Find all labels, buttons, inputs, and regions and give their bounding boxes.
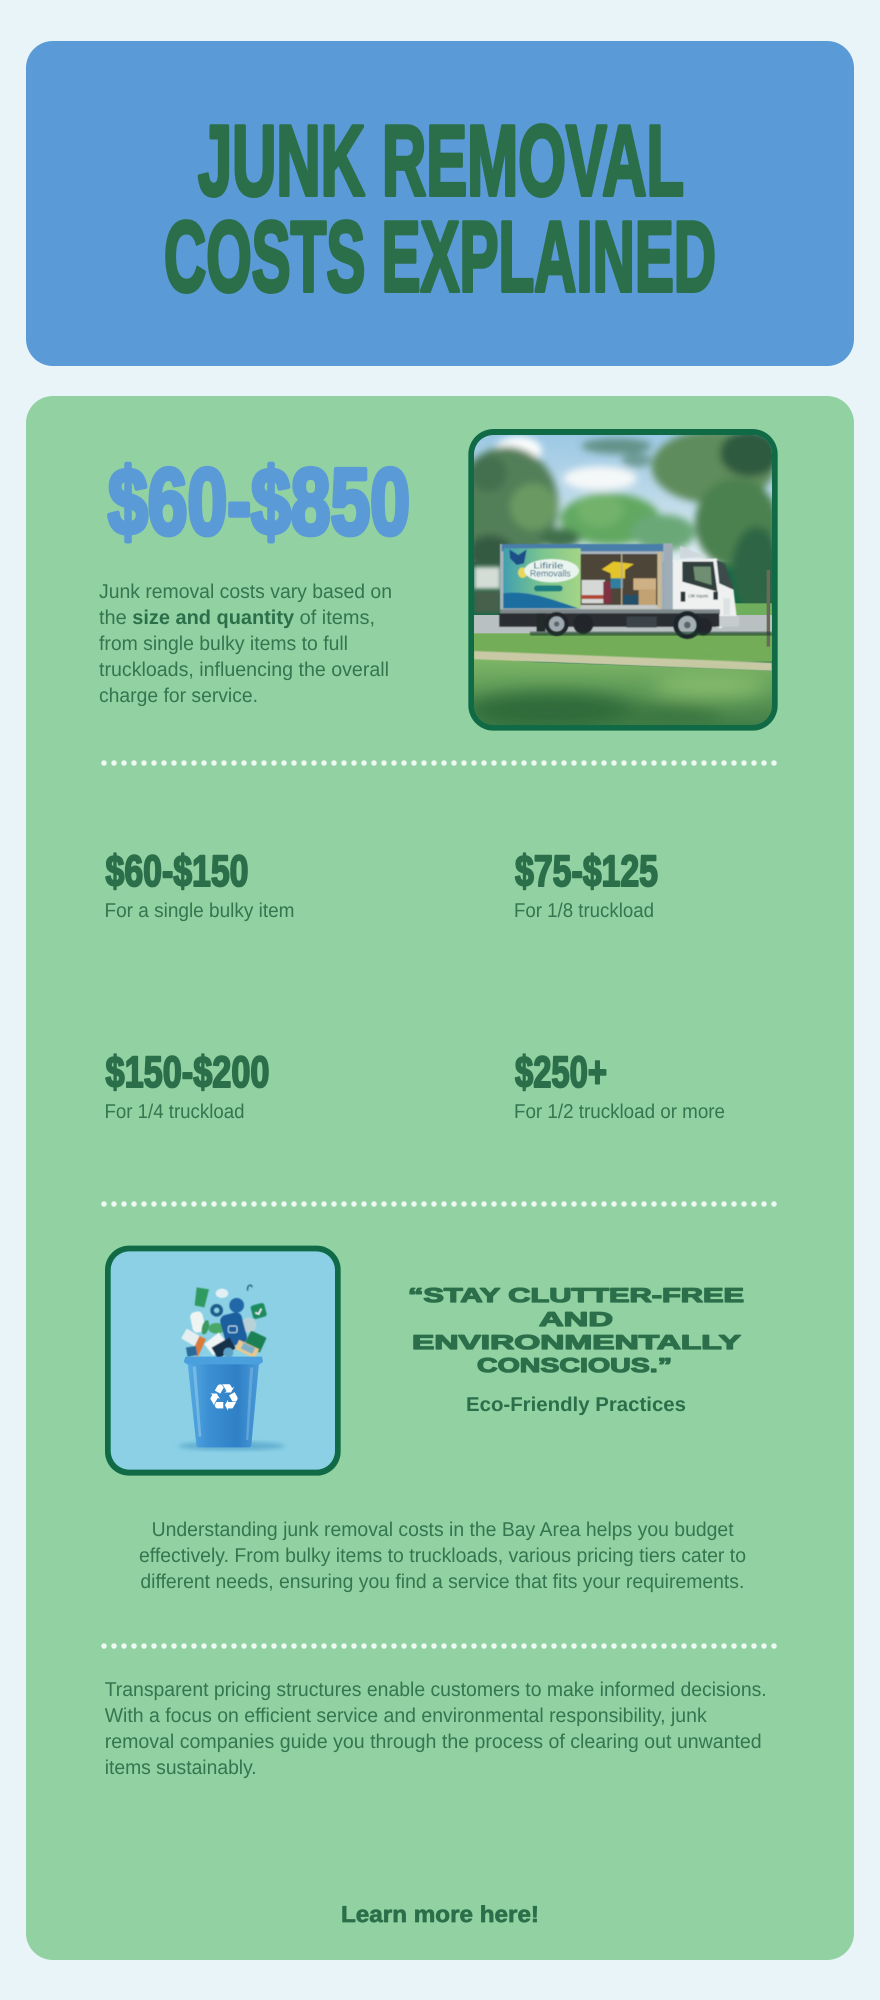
divider: dotted top xyxy=(104,760,776,766)
price item: 1/8 truckload: $75-$125 xyxy=(515,847,658,896)
icon: bin: ♻ xyxy=(207,1376,241,1419)
price item: 1/4 truckload: For 1/4 truckload xyxy=(104,1101,244,1123)
text block: budget summary: Understanding junk removal costs in the Bay Area helps you budget xyxy=(152,1519,734,1541)
text block: budget summary xyxy=(139,1519,746,1593)
panel: title header xyxy=(26,41,854,366)
price item: 1/8 truckload: For 1/8 truckload xyxy=(514,900,654,922)
text block: budget summary: different needs, ensuring you find a service that fits your requirements. xyxy=(140,1571,744,1593)
price item: single bulky item xyxy=(104,847,294,922)
price item: single bulky item: $60-$150 xyxy=(106,847,248,896)
price item: 1/2 truckload or more: For 1/2 truckload or more xyxy=(514,1101,725,1123)
quote attribution: Eco-Friendly Practices xyxy=(466,1394,686,1416)
icon: truck xyxy=(499,543,739,639)
quote: ENVIRONMENTALLY xyxy=(412,1332,742,1354)
text block: intro: from single bulky items to full xyxy=(99,633,348,655)
text block: intro: charge for service. xyxy=(99,685,258,707)
image: junk removal truck photo xyxy=(455,429,782,731)
text block: intro xyxy=(99,581,392,707)
headline price range: $60-$850 xyxy=(108,449,410,554)
icon: junk items xyxy=(181,1285,267,1359)
text block: intro: truckloads, influencing the overall xyxy=(99,659,389,681)
price item: 1/4 truckload xyxy=(104,1048,270,1123)
divider: dotted bottom xyxy=(104,1643,776,1649)
image: recycling bin illustration xyxy=(105,1246,341,1476)
text block: intro: the size and quantity of items, xyxy=(99,607,375,629)
text block: budget summary: effectively. From bulky items to truckloads, various pricing tiers cater to xyxy=(139,1545,746,1567)
quote: “STAY CLUTTER-FREE xyxy=(408,1285,744,1307)
price item: 1/4 truckload: $150-$200 xyxy=(106,1048,270,1097)
panel: main content xyxy=(26,396,854,1960)
icon: truck: LNK Imports xyxy=(688,593,708,598)
title xyxy=(164,105,716,313)
divider: dotted middle xyxy=(104,1201,776,1207)
text block: transparent pricing: removal companies guide you through the process of clearing out unwanted xyxy=(105,1731,762,1753)
text block: transparent pricing: items sustainably. xyxy=(105,1757,257,1779)
icon: bin xyxy=(184,1357,263,1447)
text block: transparent pricing xyxy=(105,1679,767,1779)
call to action: Learn more here! xyxy=(341,1901,539,1927)
quote: AND xyxy=(539,1309,613,1331)
text block: intro: Junk removal costs vary based on xyxy=(99,581,392,603)
price item: 1/8 truckload xyxy=(514,847,658,922)
icon: truck: Lifirile xyxy=(533,561,563,571)
quote xyxy=(408,1285,744,1377)
price item: 1/2 truckload or more xyxy=(514,1048,725,1123)
price item: 1/2 truckload or more: $250+ xyxy=(515,1048,607,1097)
text block: transparent pricing: Transparent pricing structures enable customers to make informed decisions. xyxy=(105,1679,767,1701)
icon: truck: Removalls xyxy=(530,568,571,579)
text block: transparent pricing: With a focus on efficient service and environmental responsibility, junk xyxy=(105,1705,708,1727)
price item: single bulky item: For a single bulky item xyxy=(104,900,294,922)
quote: CONSCIOUS.” xyxy=(477,1355,672,1377)
